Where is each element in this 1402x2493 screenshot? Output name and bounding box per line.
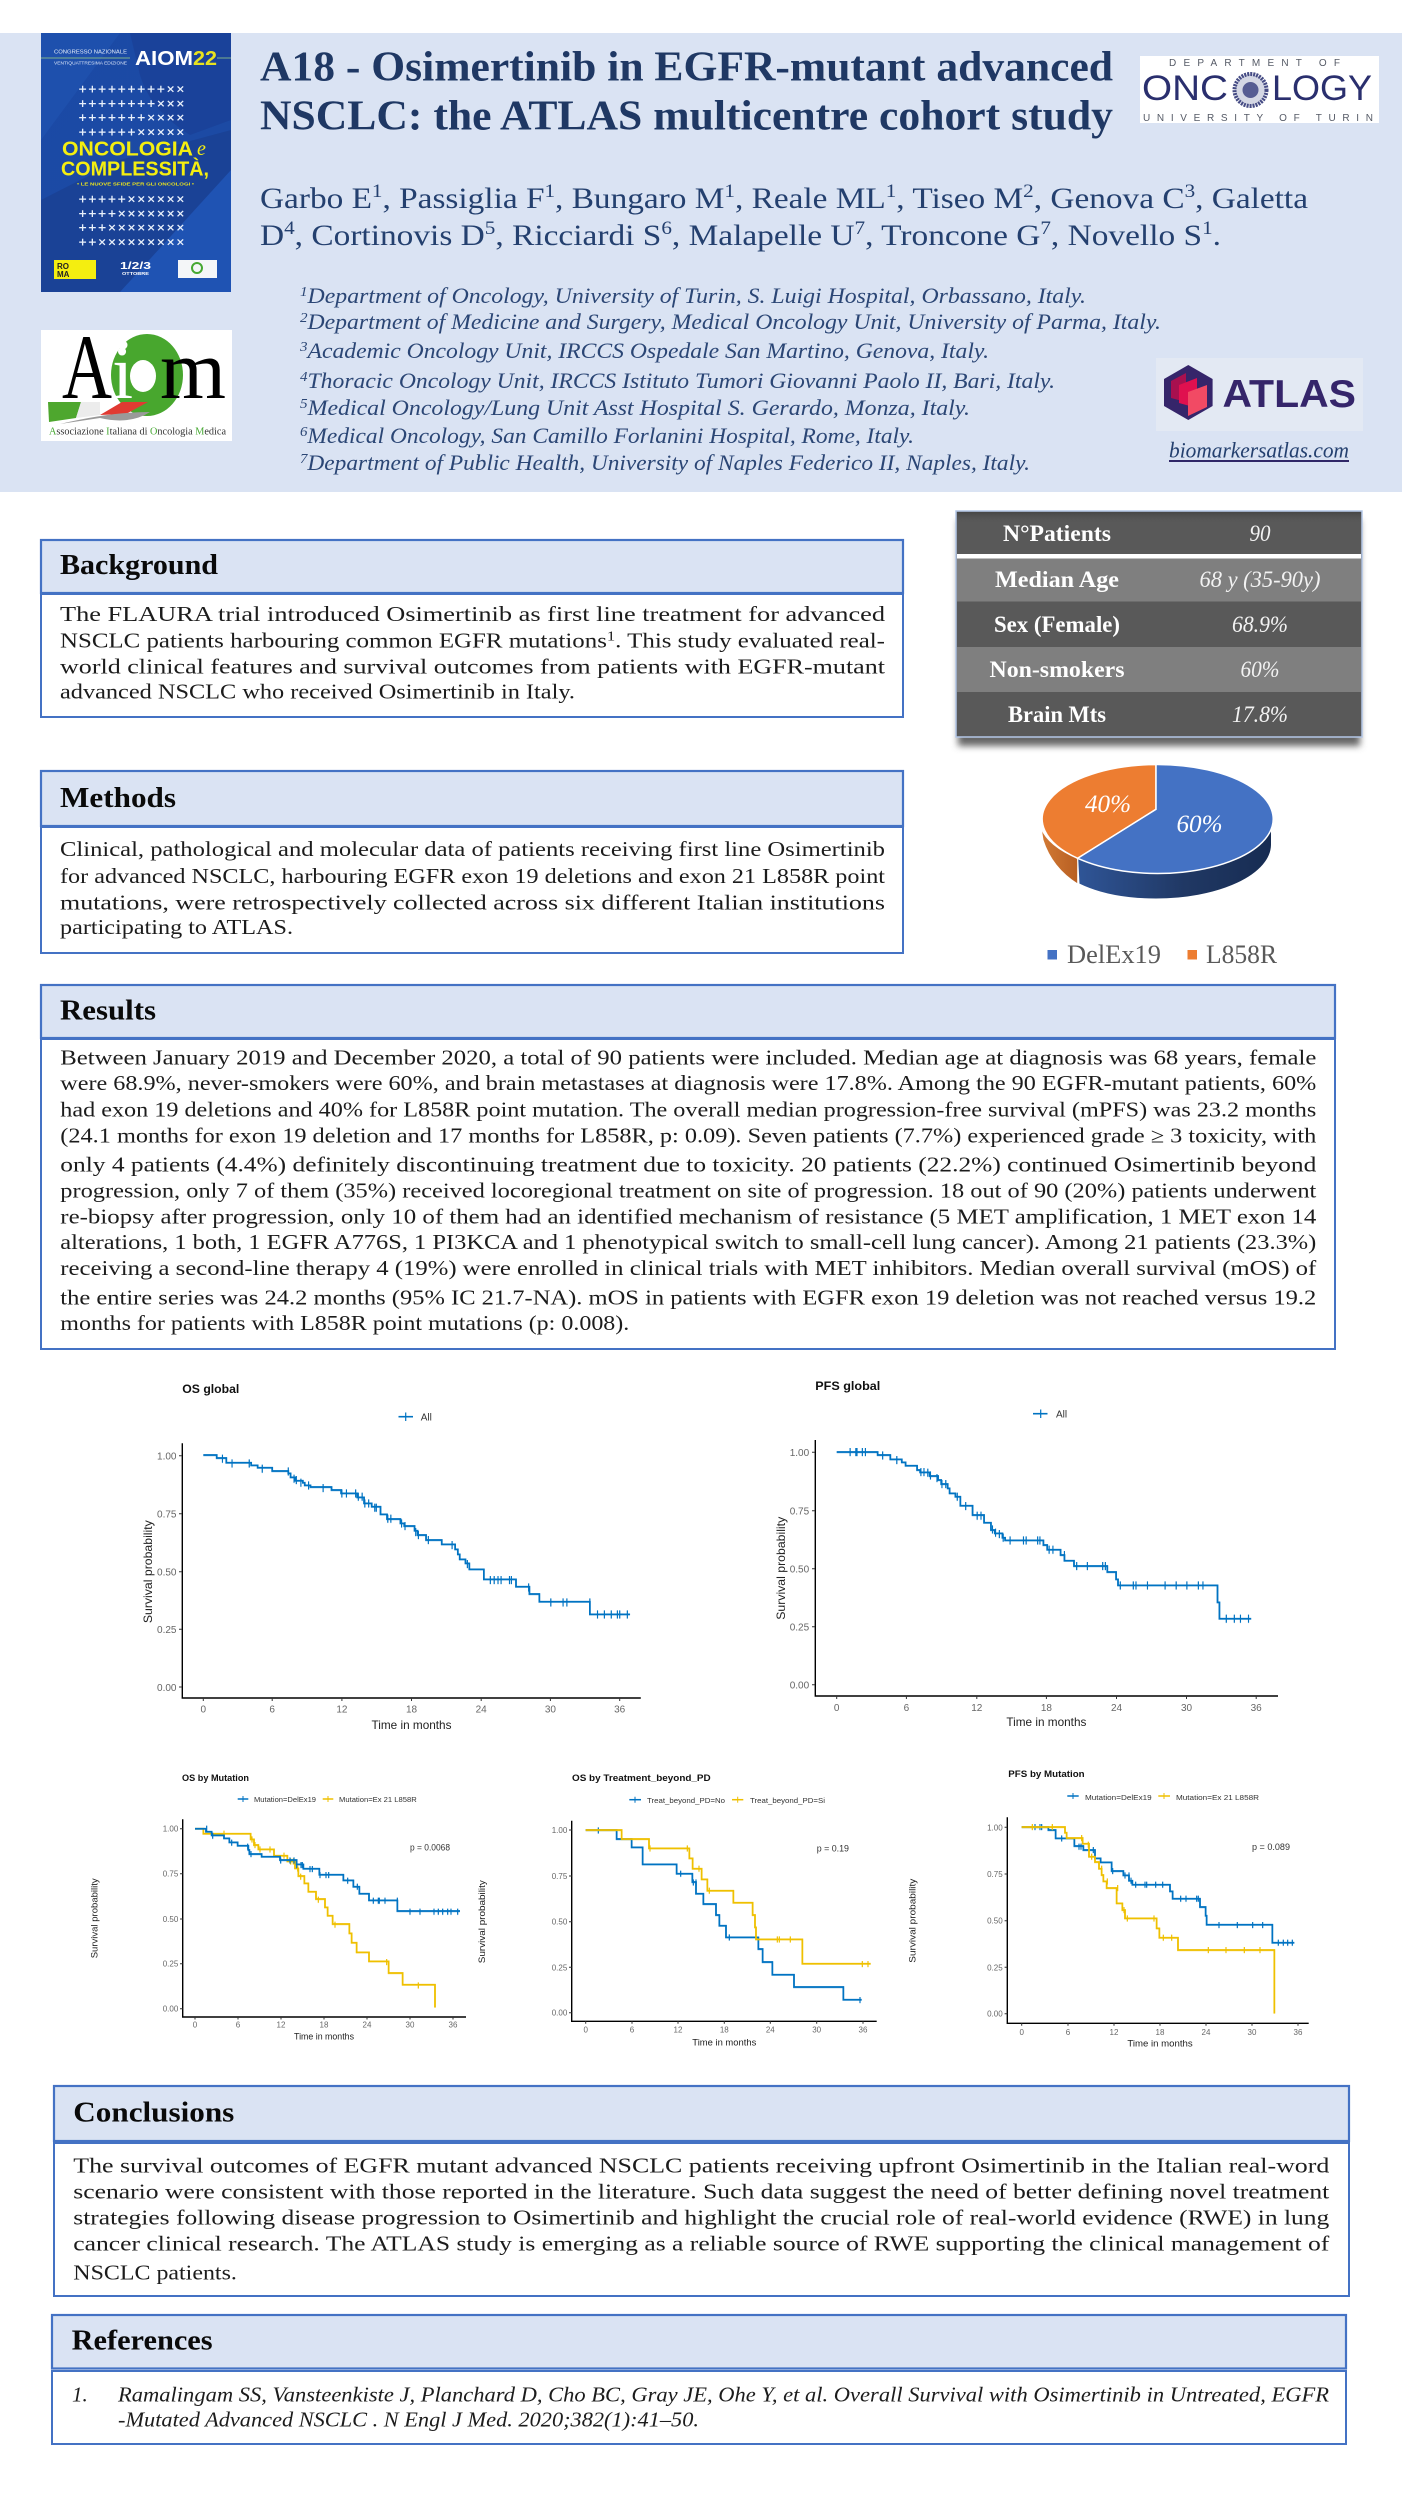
pie chart: mutation type: 60% — [1176, 811, 1222, 838]
text: background body: The FLAURA trial introduced Osimertinib as first line treatment for advanced — [60, 602, 886, 626]
authors: 6 — [661, 218, 672, 239]
authors: 1 — [886, 181, 896, 202]
chart: OS by Mutation: Mutation=Ex 21 L858R — [339, 1795, 417, 1804]
department of oncology logo: ONC — [1142, 69, 1228, 108]
authors: D — [260, 219, 282, 252]
chart: PFS global: 30 — [1181, 1703, 1192, 1714]
pie chart: mutation type: 40% — [1085, 791, 1131, 818]
text: results body: progression, only 7 of them (35%) received locoregional treatment on site of progression. 18 out of 90 (20%) patients underwent — [60, 1178, 1316, 1202]
authors: 3 — [1185, 181, 1195, 202]
chart: PFS global: 36 — [1251, 1703, 1262, 1714]
chart: PFS by Mutation: 0.50 — [987, 1917, 1003, 1926]
chart: PFS by Mutation: Mutation=Ex 21 L858R — [1176, 1793, 1260, 1802]
chart: OS global: 6 — [269, 1705, 275, 1716]
chart: OS by Treatment beyond PD: Survival probability — [477, 1880, 488, 1963]
chart: PFS global — [774, 1379, 1278, 1729]
chart: PFS global: 0.75 — [790, 1506, 810, 1518]
text: conclusions body: cancer clinical research. The ATLAS study is emerging as a reliable source of RWE supporting the clinical management of — [73, 2232, 1329, 2256]
congress poster logo: COMPLESSITÀ, — [61, 158, 209, 180]
chart: OS global: 24 — [476, 1705, 487, 1716]
chart: OS global: OS global — [182, 1382, 239, 1396]
panel: conclusions — [54, 2086, 1349, 2296]
chart: OS by Treatment beyond PD: 0.75 — [552, 1872, 568, 1881]
department of oncology logo: UNIVERSITY OF TURIN — [1143, 113, 1373, 124]
congress poster logo: • LE NUOVE SFIDE PER GLI ONCOLOGI • — [77, 182, 195, 186]
congress poster logo: ++××××××××× — [78, 236, 185, 248]
text: conclusions body: scenario were consistent with those reported in the literature. Such data suggest the need of better defining novel treatment — [73, 2180, 1329, 2204]
heading: methods: Methods — [60, 783, 176, 814]
chart: OS by Treatment beyond PD: 18 — [720, 2026, 729, 2035]
chart: PFS global: 12 — [971, 1703, 983, 1714]
text: results body: (24.1 months for exon 19 deletion and 17 months for L858R, p: 0.09). Seven patients (7.7%) experienced grade ≥ 3 toxicity, with — [60, 1124, 1317, 1148]
pie legend: DelEx19 — [1067, 940, 1161, 969]
chart: OS by Treatment beyond PD: 12 — [674, 2026, 683, 2035]
authors: , Novello S — [1051, 219, 1202, 252]
chart: OS by Treatment beyond PD: p = 0.19 — [817, 1844, 849, 1854]
heading: background: Background — [60, 550, 218, 581]
patient characteristics table: 60% — [1240, 657, 1280, 682]
chart: OS by Treatment beyond PD: 0 — [583, 2026, 588, 2035]
chart: PFS global: 6 — [904, 1703, 910, 1714]
affiliations: 2 — [300, 311, 308, 326]
text: background body: NSCLC patients harbouring common EGFR mutations — [60, 628, 521, 652]
text: reference list — [72, 2383, 1329, 2432]
text: conclusions body: The survival outcomes of EGFR mutant advanced NSCLC patients receiving upfront Osimertinib in the Italian real-word — [73, 2154, 1330, 2178]
chart: PFS by Mutation: Mutation=DelEx19 — [1085, 1793, 1152, 1802]
chart: OS global: 1.00 — [157, 1452, 177, 1462]
congress poster logo: +++×××××××× — [78, 221, 185, 234]
chart: OS by Treatment beyond PD: 30 — [812, 2026, 822, 2035]
authors: . — [1213, 219, 1221, 252]
chart: PFS by Mutation: 0 — [1019, 2028, 1024, 2037]
chart: PFS by Mutation: Survival probability — [907, 1878, 918, 1963]
chart: PFS global: 18 — [1041, 1703, 1052, 1714]
chart: OS by Mutation: 0.50 — [163, 1915, 179, 1924]
text: results body: had exon 19 deletions and 40% for L858R point mutation. The overall median progression-free survival (mPFS) was 23.2 months — [60, 1098, 1316, 1122]
text: background body: 1 — [607, 630, 615, 644]
text: conclusions body: strategies following disease progression to Osimertinib and highlight the crucial role of real-world evidence (RWE) in lung — [73, 2206, 1330, 2230]
patient characteristics table: Non-smokers — [990, 657, 1125, 682]
chart: PFS global: Time in months — [1006, 1715, 1086, 1729]
chart: OS global: 0 — [201, 1705, 207, 1716]
pie legend: L858R — [1206, 940, 1278, 969]
authors: 1 — [1202, 218, 1213, 239]
patient characteristics table: 90 — [1250, 521, 1271, 546]
patient characteristics table: 17.8% — [1232, 702, 1288, 727]
chart: OS global — [141, 1382, 641, 1732]
chart: OS global: 0.75 — [157, 1510, 177, 1520]
affiliations: 7 — [300, 452, 308, 467]
text: results body — [60, 1046, 1317, 1335]
AIOM association logo: m — [160, 324, 226, 417]
patient characteristics table: 68 y (35-90y) — [1200, 567, 1320, 592]
chart: OS by Mutation: 6 — [236, 2020, 241, 2029]
chart: PFS by Mutation: 30 — [1248, 2028, 1257, 2037]
chart: PFS by Mutation: 0.00 — [987, 2010, 1003, 2019]
text: results body: receiving a second-line therapy 4 (19%) were enrolled in clinical trials with MET inhibitors. Median overall survival (mOS) of — [60, 1256, 1316, 1280]
heading: conclusions: Conclusions — [73, 2098, 234, 2129]
patient characteristics table: Brain Mts — [1008, 702, 1106, 727]
chart: OS by Treatment beyond PD: 0.50 — [552, 1918, 568, 1927]
chart: PFS global: 0.00 — [790, 1680, 810, 1692]
authors: 7 — [855, 218, 865, 239]
chart: OS by Mutation: 0 — [193, 2020, 198, 2029]
heading: results: Results — [60, 996, 156, 1026]
AIOM association logo: A — [62, 316, 112, 418]
text: background body: . This study evaluated real- — [615, 628, 885, 652]
congress poster logo: ++++++++××× — [78, 97, 185, 110]
text: results body: Between January 2019 and December 2020, a total of 90 patients were included. Median age at diagnosis was 68 years, female — [60, 1046, 1316, 1070]
text: background body: advanced NSCLC who received Osimertinib in Italy. — [60, 680, 575, 704]
chart: OS by Treatment beyond PD: Time in months — [692, 2038, 757, 2049]
chart: PFS by Mutation: 12 — [1110, 2028, 1119, 2037]
chart: PFS by Mutation: 24 — [1202, 2028, 1211, 2037]
text: results body: the entire series was 24.2 months (95% IC 21.7-NA). mOS in patients with EGFR exon 19 deletion was not reached versus 19.2 — [60, 1286, 1316, 1310]
text: reference list: 1. — [72, 2383, 88, 2407]
authors: , Bungaro M — [555, 182, 724, 215]
chart: PFS by Mutation: 6 — [1066, 2028, 1071, 2037]
congress poster logo: +++++++++×× — [78, 82, 185, 96]
patient characteristics table: Sex (Female) — [994, 612, 1120, 637]
pie legend — [1048, 940, 1278, 969]
congress poster logo: OTTOBRE — [122, 271, 149, 276]
chart: OS by Mutation: 24 — [363, 2020, 372, 2029]
chart: PFS global: 1.00 — [790, 1448, 810, 1459]
ATLAS logo — [1156, 358, 1363, 431]
congress poster logo: CONGRESSO NAZIONALE — [54, 50, 127, 56]
affiliations: Department of Public Health, University of Naples Federico II, Naples, Italy. — [306, 450, 1030, 475]
chart: OS global: 30 — [545, 1705, 556, 1716]
authors: , Ricciardi S — [495, 219, 661, 252]
patient characteristics table: 68.9% — [1232, 612, 1288, 637]
authors: , Galetta — [1195, 182, 1308, 215]
congress poster logo: VENTIQUATTRESIMA EDIZIONE — [54, 60, 127, 66]
authors: 2 — [1023, 181, 1034, 202]
chart: OS by Mutation — [89, 1773, 466, 2042]
panel: background — [41, 540, 903, 717]
affiliations: Department of Oncology, University of Turin, S. Luigi Hospital, Orbassano, Italy. — [306, 283, 1086, 308]
congress poster logo: RO — [57, 262, 69, 271]
affiliations: Academic Oncology Unit, IRCCS Ospedale San Martino, Genova, Italy. — [305, 338, 989, 363]
affiliations: 5 — [300, 397, 308, 412]
authors: 1 — [544, 181, 555, 202]
chart: OS global: All — [421, 1413, 432, 1424]
chart: PFS by Mutation — [907, 1769, 1309, 2050]
department of oncology logo — [1140, 56, 1379, 124]
congress poster logo: AIOM — [135, 48, 193, 70]
chart: OS by Mutation: 0.75 — [163, 1870, 179, 1879]
department of oncology logo: DEPARTMENT OF — [1169, 58, 1340, 69]
panel: methods — [41, 771, 903, 953]
chart: OS by Mutation: 18 — [320, 2020, 329, 2029]
chart: PFS global: All — [1056, 1410, 1067, 1420]
title: NSCLC: the ATLAS multicentre cohort study — [260, 94, 1113, 140]
AIOM association logo: Associazione Italiana di Oncologia Medica — [49, 426, 227, 438]
text: reference list: Ramalingam SS, Vansteenkiste J, Planchard D, Cho BC, Gray JE, Ohe Y, et al. Overall Survival with Osimertinib in Untreated, EGFR — [117, 2383, 1329, 2407]
chart: PFS by Mutation: 0.75 — [987, 1870, 1003, 1879]
chart: OS by Mutation: Mutation=DelEx19 — [254, 1795, 316, 1804]
text: results body: were 68.9%, never-smokers were 60%, and brain metastases at diagnosis were 17.8%. Among the 90 EGFR-mutant patients, 60% — [60, 1071, 1316, 1095]
department of oncology logo: LOGY — [1272, 69, 1372, 108]
chart: OS by Treatment beyond PD: 24 — [766, 2026, 775, 2035]
chart: OS by Treatment beyond PD: 0.00 — [552, 2009, 568, 2018]
chart: OS by Mutation: 30 — [406, 2020, 415, 2029]
text: conclusions body: NSCLC patients. — [73, 2260, 237, 2284]
congress poster logo: +++++++×××× — [78, 111, 185, 124]
chart: OS global: Time in months — [372, 1718, 452, 1732]
chart: OS by Treatment beyond PD: OS by Treatment_beyond_PD — [572, 1773, 711, 1783]
authors: Garbo E — [260, 182, 361, 215]
chart: PFS global: 0.50 — [790, 1564, 810, 1576]
authors: , Tiseo M — [896, 182, 1023, 215]
congress poster logo: 22 — [193, 48, 217, 70]
authors: , Reale ML — [735, 182, 886, 215]
chart: OS by Treatment beyond PD — [477, 1773, 877, 2049]
congress poster logo: MA — [57, 270, 70, 279]
chart: OS by Mutation: Time in months — [294, 2031, 354, 2042]
ATLAS logo: ATLAS — [1222, 373, 1356, 416]
panel: references — [52, 2315, 1346, 2444]
chart: PFS by Mutation: 36 — [1294, 2028, 1303, 2037]
affiliations: Medical Oncology/Lung Unit Asst Hospital S. Gerardo, Monza, Italy. — [307, 395, 970, 420]
authors — [260, 181, 1308, 252]
affiliations: 3 — [299, 340, 308, 355]
AIOM association logo — [41, 316, 232, 441]
affiliations: Medical Oncology, San Camillo Forlanini Hospital, Rome, Italy. — [306, 423, 914, 448]
chart: PFS by Mutation: 1.00 — [987, 1823, 1003, 1832]
chart: PFS global: PFS global — [815, 1379, 880, 1393]
chart: PFS global: Survival probability — [774, 1517, 788, 1620]
website link: biomarkersatlas.com — [1169, 438, 1349, 462]
authors: 1 — [724, 181, 735, 202]
chart: OS by Mutation: 36 — [449, 2020, 458, 2029]
chart: PFS by Mutation: p = 0.089 — [1252, 1842, 1290, 1852]
authors: 5 — [485, 218, 495, 239]
text: background body — [60, 602, 886, 704]
chart: PFS by Mutation: 0.25 — [987, 1963, 1003, 1972]
header banner — [0, 33, 1402, 492]
chart: OS by Treatment beyond PD: Treat_beyond_PD=No — [647, 1796, 725, 1805]
chart: OS by Treatment beyond PD: 36 — [859, 2026, 868, 2035]
heading: references: References — [72, 2325, 213, 2356]
affiliations: Thoracic Oncology Unit, IRCCS Istituto Tumori Giovanni Paolo II, Bari, Italy. — [308, 368, 1055, 393]
chart: OS by Mutation: p = 0.0068 — [410, 1843, 450, 1853]
chart: OS global: 0.25 — [157, 1625, 177, 1636]
text: methods body — [60, 837, 885, 939]
affiliations — [299, 283, 1161, 475]
chart: OS by Mutation: 12 — [277, 2020, 286, 2029]
chart: OS by Treatment beyond PD: 0.25 — [552, 1963, 568, 1972]
chart: PFS by Mutation: Time in months — [1127, 2039, 1193, 2050]
chart: OS global: 0.00 — [157, 1683, 177, 1694]
chart: OS by Treatment beyond PD: 1.00 — [552, 1826, 568, 1835]
chart: OS global: Survival probability — [141, 1520, 155, 1623]
affiliations: 1 — [300, 285, 308, 300]
text: results body: months for patients with L858R point mutations (p: 0.008). — [60, 1311, 629, 1335]
text: methods body: for advanced NSCLC, harbouring EGFR exon 19 deletions and exon 21 L858R point — [60, 864, 885, 888]
text: results body: re-biopsy after progression, only 10 of them had an identified mechanism of resistance (5 MET amplification, 1 MET exon 14 — [60, 1204, 1317, 1228]
chart: OS by Treatment beyond PD: 6 — [630, 2026, 635, 2035]
authors: 1 — [372, 181, 382, 202]
chart: OS global: 0.50 — [157, 1568, 177, 1578]
authors: , Cortinovis D — [295, 219, 485, 252]
congress poster logo: ONCOLOGIA — [62, 138, 193, 160]
patient characteristics table: Median Age — [995, 567, 1119, 592]
chart: OS by Mutation: 1.00 — [163, 1825, 179, 1834]
affiliations: Department of Medicine and Surgery, Medical Oncology Unit, University of Parma, Italy. — [306, 309, 1161, 334]
chart: OS by Treatment beyond PD: Treat_beyond_PD=Si — [750, 1796, 825, 1805]
text: reference list: -Mutated Advanced NSCLC . N Engl J Med. 2020;382(1):41–50. — [118, 2408, 699, 2432]
chart: OS by Mutation: 0.25 — [163, 1960, 179, 1969]
authors: 7 — [1040, 218, 1051, 239]
authors: 4 — [284, 218, 295, 239]
congress poster logo: 1/2/3 — [120, 261, 152, 272]
authors: , Malapelle U — [672, 219, 855, 252]
text: methods body: participating to ATLAS. — [60, 915, 293, 939]
authors: , Passiglia F — [382, 182, 544, 215]
title: A18 - Osimertinib in EGFR-mutant advanced — [260, 44, 1113, 90]
AIOM association logo: i — [112, 331, 133, 415]
chart: PFS by Mutation: PFS by Mutation — [1008, 1769, 1085, 1779]
chart: PFS by Mutation: 18 — [1156, 2028, 1165, 2037]
congress poster logo: +++++×××××× — [78, 192, 185, 206]
affiliations: 6 — [300, 425, 307, 440]
authors: , Genova C — [1034, 182, 1185, 215]
chart: OS by Mutation: OS by Mutation — [182, 1773, 249, 1783]
text: methods body: Clinical, pathological and molecular data of patients receiving first line Osimertinib — [60, 837, 885, 861]
chart: OS global: 18 — [406, 1705, 417, 1716]
title — [260, 44, 1113, 140]
chart: OS global: 12 — [336, 1705, 348, 1716]
chart: PFS global: 24 — [1111, 1703, 1122, 1714]
congress poster logo: e — [197, 138, 206, 160]
text: results body: only 4 patients (4.4%) definitely discontinuing treatment due to toxicity. 20 patients (22.2%) continued Osimertinib beyond — [60, 1152, 1317, 1176]
panel: results — [41, 985, 1335, 1349]
patient characteristics table — [956, 511, 1362, 746]
congress poster logo — [41, 33, 231, 292]
chart: PFS global: 0 — [834, 1703, 840, 1714]
chart: OS by Mutation: Survival probability — [89, 1878, 100, 1958]
pie chart: mutation type — [1041, 764, 1273, 899]
text: methods body: mutations, were retrospectively collected across six different Italian institutions — [60, 890, 885, 914]
authors: , Troncone G — [865, 219, 1040, 252]
patient characteristics table: N°Patients — [1003, 521, 1111, 546]
chart: OS global: 36 — [614, 1705, 626, 1716]
text: conclusions body — [73, 2154, 1330, 2284]
text: background body: world clinical features and survival outcomes from patients with EGFR-mutant — [60, 654, 885, 678]
chart: PFS global: 0.25 — [790, 1622, 810, 1634]
congress poster logo: ++++××××××× — [78, 207, 185, 220]
congress poster logo: ++++++××××× — [78, 126, 185, 138]
chart: OS by Mutation: 0.00 — [163, 2005, 179, 2014]
affiliations: 4 — [300, 370, 308, 385]
text: results body: alterations, 1 both, 1 EGFR A776S, 1 PI3KCA and 1 phenotypical switch to small-cell lung cancer). Among 21 patients (23.3%) — [60, 1230, 1316, 1254]
